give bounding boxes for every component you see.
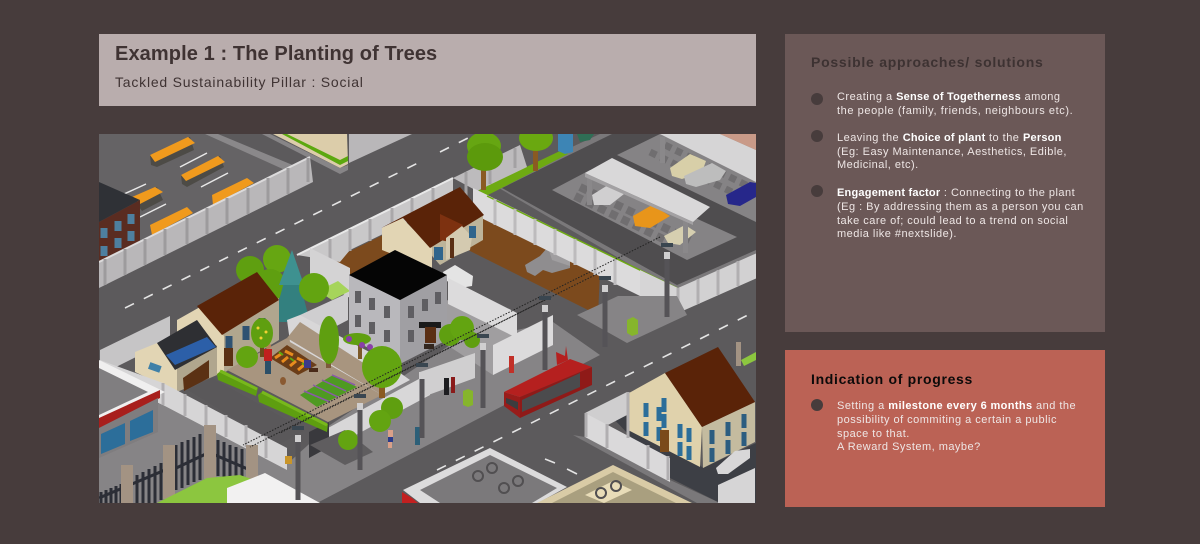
- grey fence behind garage: [100, 316, 170, 375]
- far right fence pillar: [736, 342, 756, 366]
- car: [684, 163, 726, 187]
- garden back fence: [287, 315, 410, 395]
- pink building corner: [720, 134, 756, 150]
- item 3: media like #nextslide).: [837, 228, 957, 240]
- item: space to that.: [837, 428, 910, 440]
- couple: [444, 377, 455, 395]
- runner: [388, 430, 393, 448]
- white yard wall by lawn: [310, 248, 350, 298]
- carport 2: [660, 134, 756, 182]
- item: possibility of commiting a certain a public: [837, 414, 1057, 426]
- panel: indication of progress: [785, 350, 1105, 507]
- pear tree: [251, 318, 273, 357]
- item 2: Medicinal, etc).: [837, 159, 919, 171]
- car: [726, 182, 756, 206]
- boulder: [525, 250, 570, 276]
- walker: [415, 427, 420, 445]
- car: [633, 205, 670, 228]
- bin: [627, 317, 638, 336]
- brick building: [99, 182, 140, 266]
- item 2: (Eg: Easy Maintenance, Aesthetics, Edible,: [837, 146, 1067, 158]
- item 3: take care of; could lead to a trend on social: [837, 215, 1068, 227]
- road lane markings: [124, 137, 468, 309]
- bush: [338, 430, 358, 450]
- item: Setting a milestone every 6 months and the: [837, 400, 1076, 412]
- bush: [381, 397, 403, 419]
- service road loop: [492, 134, 756, 292]
- left building: [99, 360, 165, 458]
- yard beside black building: [447, 300, 553, 375]
- item 3: (Eg : By addressing them as a person you can: [837, 201, 1084, 213]
- bullet: [811, 93, 823, 105]
- car: [670, 154, 706, 179]
- item: A Reward System, maybe?: [837, 441, 981, 453]
- bullet: [811, 399, 823, 411]
- white car: [716, 449, 750, 474]
- bullet: [811, 130, 823, 142]
- sidewalk with bin: [577, 296, 687, 343]
- fence behind back building: [349, 134, 412, 163]
- white roof building: [227, 473, 320, 503]
- red bus: [504, 346, 592, 418]
- right house: [628, 347, 755, 468]
- front fence of road: [297, 178, 453, 262]
- lawn with trees and spruce: [236, 245, 350, 322]
- vegetable patch: [270, 345, 317, 375]
- tree: [467, 132, 503, 190]
- big tree: [362, 346, 402, 398]
- parking fence: [99, 157, 313, 288]
- item 3: Engagement factor : Connecting to the plant: [837, 187, 1075, 199]
- pedestrians: [388, 344, 514, 448]
- heading: Possible approaches/ solutions: [811, 54, 1044, 70]
- road surface: [99, 134, 756, 503]
- item 3: [837, 187, 1084, 240]
- right corner fence: [718, 468, 755, 503]
- parking area 2: [617, 134, 756, 222]
- parking area 1: [552, 170, 737, 260]
- tree: [519, 134, 553, 171]
- gray roof building: [402, 448, 567, 503]
- gardener: [304, 360, 318, 372]
- bus: [181, 156, 225, 187]
- bus: [150, 137, 195, 167]
- heading: Indication of progress: [811, 371, 973, 387]
- trees behind fence: [467, 134, 553, 190]
- sidewalk: [99, 322, 600, 503]
- bus: [212, 178, 254, 205]
- bullet: [811, 185, 823, 197]
- carport 1: [585, 158, 710, 253]
- bush: [369, 410, 391, 432]
- header panel: [99, 34, 756, 106]
- van by central house: [443, 265, 473, 288]
- fence in front of lawn: [300, 294, 348, 326]
- bus: [150, 207, 193, 235]
- item 2: Leaving the Choice of plant to the Person: [837, 132, 1062, 144]
- bush: [439, 316, 480, 348]
- garden trees and bushes: [236, 316, 480, 450]
- grass patch: [157, 475, 320, 503]
- item 1: the people (family, friends, neighbours etc).: [837, 105, 1073, 117]
- green bin: [463, 389, 473, 407]
- item: [837, 400, 1076, 453]
- dog: [424, 344, 434, 349]
- driveway: [188, 378, 305, 445]
- bins: [558, 134, 594, 154]
- parking lot with school buses: [99, 134, 292, 240]
- subtitle: Tackled Sustainability Pillar : Social: [115, 74, 364, 90]
- long white fence along the field: [473, 188, 677, 296]
- garden front fence: [100, 360, 287, 470]
- cream roof building: [537, 465, 692, 503]
- fence on right: [640, 253, 757, 313]
- iron fence with pillars: [99, 425, 258, 503]
- item 1: [837, 91, 1073, 117]
- bus: [132, 187, 163, 211]
- chicken: [280, 377, 286, 385]
- garden paving: [227, 338, 382, 422]
- bush: [236, 346, 258, 368]
- yard fence: [585, 392, 670, 482]
- central house: [381, 187, 484, 270]
- left house: [177, 272, 279, 390]
- side fence and gate: [309, 373, 430, 465]
- right house yard: [573, 405, 756, 503]
- black-roofed building: [349, 250, 447, 364]
- car: [592, 185, 624, 205]
- hedges: [217, 370, 328, 432]
- wisteria: [343, 333, 373, 359]
- back fence near trees: [453, 145, 527, 196]
- poles and wires: [243, 237, 673, 500]
- property brown field: [337, 219, 600, 310]
- isometric city illustration: [99, 134, 756, 503]
- item 1: Creating a Sense of Togetherness among: [837, 91, 1061, 103]
- garage with solar panel: [135, 320, 217, 392]
- grass strip: [478, 150, 568, 196]
- farmer: [264, 343, 272, 374]
- item 2: [837, 132, 1067, 171]
- title: Example 1 : The Planting of Trees: [115, 43, 437, 65]
- crop rows: [300, 375, 357, 407]
- panel: possible approaches: [785, 34, 1105, 332]
- car: [664, 225, 696, 245]
- back building with green base: [262, 134, 348, 174]
- fences near the plaza: [420, 278, 553, 398]
- tall tree: [319, 316, 339, 368]
- person in red: [509, 356, 514, 373]
